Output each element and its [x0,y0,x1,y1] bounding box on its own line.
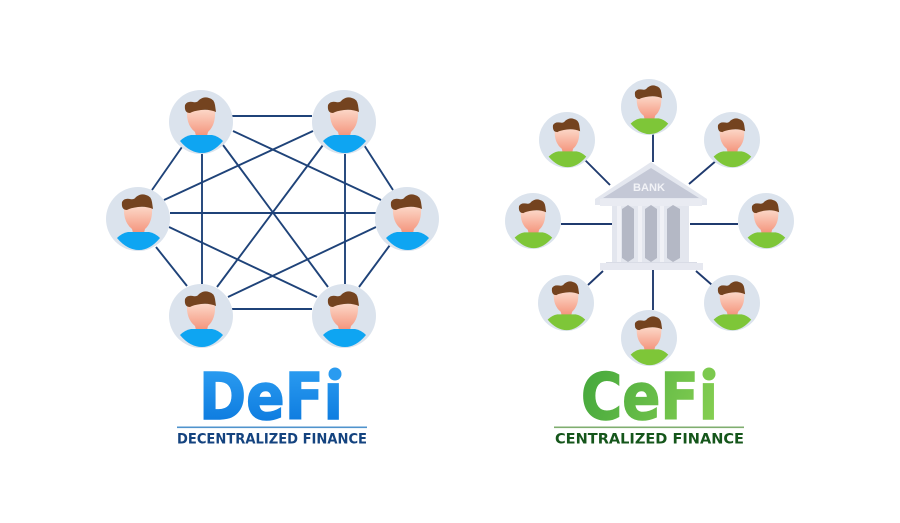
divider: CeFi underline [554,426,744,428]
person: right [375,187,439,251]
heading: CeFi: CeFi [581,361,718,435]
panel: DeFi network [106,90,439,348]
person: upper left [539,112,595,168]
person: lower left [538,275,594,331]
person: left [505,193,561,249]
icon: bank [595,162,707,270]
heading: DeFi: DeFi [199,361,343,435]
subtitle: Decentralized Finance: DECENTRALIZED FINANCE [177,432,367,448]
icon: bank: BANK [633,182,665,194]
panel: CeFi hub [505,79,794,366]
person: top left [169,90,233,154]
person: bottom [621,310,677,366]
person: top right [312,90,376,154]
spoke lines [561,134,738,310]
person: upper right [704,112,760,168]
subtitle: Centralized Finance: CENTRALIZED FINANCE [555,432,744,448]
person: top [621,79,677,135]
person: left [106,187,170,251]
person: bottom right [312,284,376,348]
person: lower right [704,275,760,331]
network connection lines [152,116,393,309]
divider: DeFi underline [177,426,367,428]
person: right [738,193,794,249]
person: bottom left [169,284,233,348]
